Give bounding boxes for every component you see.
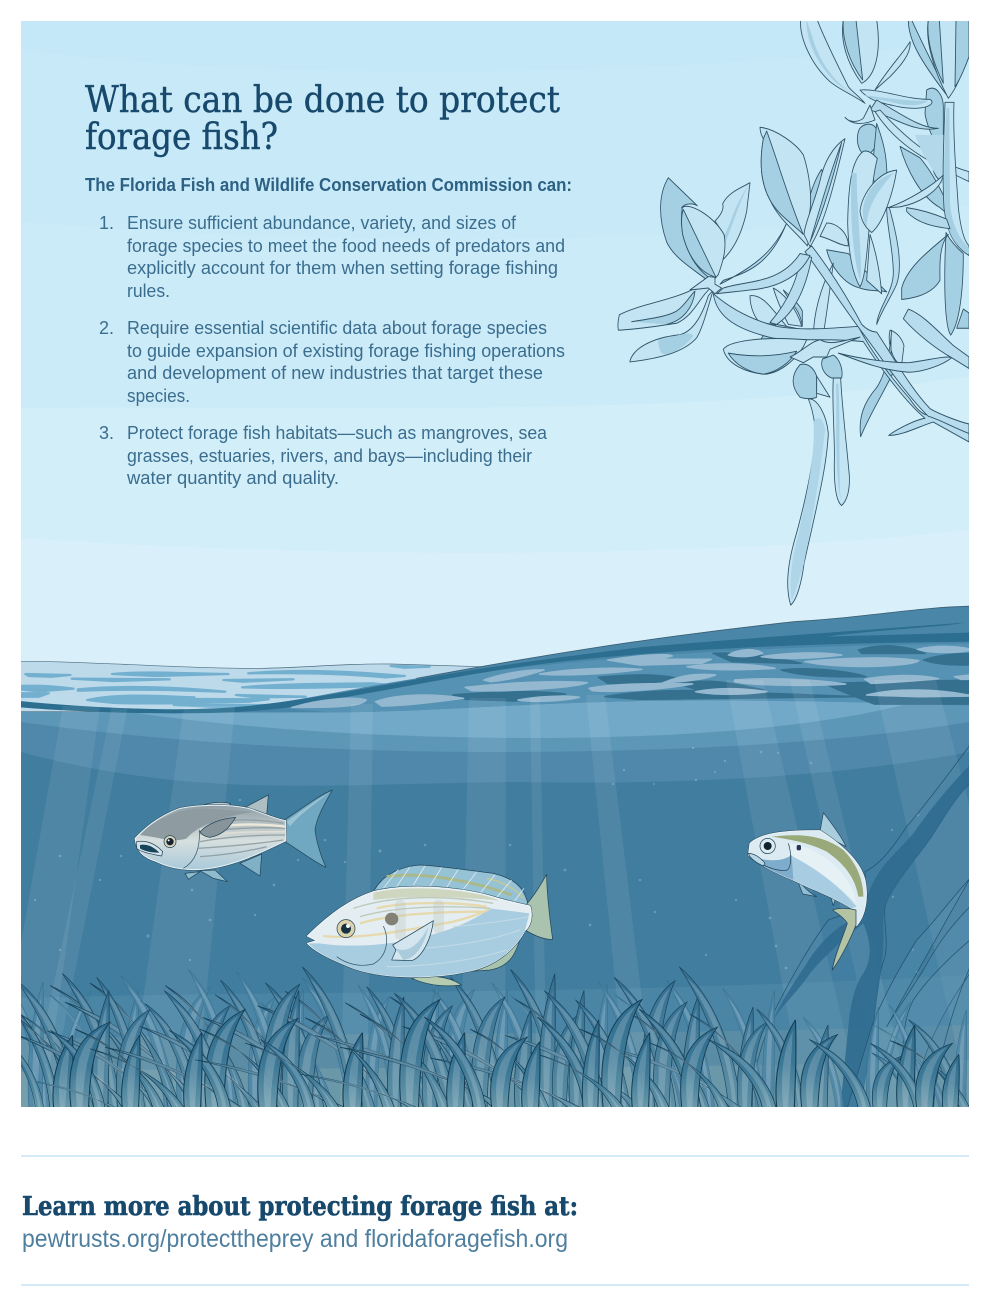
fins xyxy=(245,795,268,815)
list item 2: species. xyxy=(127,386,190,406)
tail xyxy=(525,874,553,939)
gill and pectoral fin xyxy=(183,830,199,868)
near wave body xyxy=(20,606,980,713)
main branches xyxy=(713,208,969,442)
sea grass: background blades xyxy=(2,969,967,1112)
near wave lighter band xyxy=(286,643,980,712)
sea grass: middle blades xyxy=(16,967,970,1112)
underwater gradient bands xyxy=(21,680,969,1107)
root body xyxy=(747,745,970,1110)
fish: pinfish xyxy=(307,865,553,986)
list item 3: grasses, estuaries, rivers, and bays—including their xyxy=(127,446,532,466)
sky background xyxy=(21,21,969,721)
footer call to action: Learn more about protecting forage fish at: xyxy=(22,1192,578,1222)
list item 1: explicitly account for them when setting forage fishing xyxy=(127,258,558,278)
right stem with pod xyxy=(888,102,969,335)
far wave xyxy=(20,662,481,712)
subheading: The Florida Fish and Wildlife Conservation Commission can: xyxy=(85,175,572,195)
list item 3: Protect forage fish habitats—such as mangroves, sea xyxy=(127,423,548,443)
fish: scaled sardine xyxy=(748,813,866,970)
pod leaf pair at centre xyxy=(760,127,897,287)
body xyxy=(307,887,531,977)
snout xyxy=(748,853,765,866)
eye xyxy=(164,836,176,848)
mouth xyxy=(137,841,163,856)
heading: What can be done to protect xyxy=(85,80,560,121)
stripes xyxy=(198,820,285,857)
sea grass: front blades xyxy=(0,1000,971,1112)
fish: silver mullet xyxy=(135,790,332,882)
light foam patches xyxy=(293,647,980,707)
gill xyxy=(763,843,791,870)
list item 1: forage species to meet the food needs of predators and xyxy=(127,236,565,256)
near wave dark band xyxy=(20,623,980,713)
lower fins xyxy=(797,878,817,897)
heading: forage fish? xyxy=(85,117,278,158)
mangrove branches and leaves xyxy=(618,102,969,605)
list item 2 xyxy=(99,318,565,406)
list item 1 xyxy=(99,213,565,301)
mangrove prop roots xyxy=(747,745,970,1110)
list item 2: Require essential scientific data about forage species xyxy=(127,318,547,338)
tail xyxy=(283,790,332,867)
spot xyxy=(385,913,398,925)
footer links: pewtrusts.org/protecttheprey and floridaforagefish.org xyxy=(22,1225,568,1253)
mangrove top leaves xyxy=(801,20,969,182)
back leaves at centre xyxy=(750,169,948,437)
spot xyxy=(797,845,801,850)
list item 1: Ensure sufficient abundance, variety, and sizes of xyxy=(127,213,517,233)
sun rays xyxy=(0,680,990,1107)
list item 3 xyxy=(99,423,548,488)
lower fins xyxy=(467,933,522,972)
list item 2: and development of new industries that target these xyxy=(127,363,543,383)
list item 2: to guide expansion of existing forage fishing operations xyxy=(127,341,565,361)
list item 1: rules. xyxy=(127,281,170,301)
list item 1: 1. xyxy=(99,213,114,233)
dorsal fin xyxy=(820,813,846,847)
vertical bands xyxy=(395,900,444,940)
body xyxy=(135,805,286,870)
hanging propagules xyxy=(723,337,860,605)
tail xyxy=(832,908,856,970)
pectoral fin xyxy=(392,921,433,961)
gill xyxy=(337,926,387,965)
stripes xyxy=(323,903,490,937)
list item 3: water quantity and quality. xyxy=(126,468,339,488)
water specks xyxy=(34,747,919,973)
list item 3: 3. xyxy=(99,423,114,443)
heading xyxy=(85,80,560,158)
right roots xyxy=(847,878,970,1110)
dark patches xyxy=(454,646,980,704)
list item 2: 2. xyxy=(99,318,114,338)
body xyxy=(748,831,866,926)
dorsal fin xyxy=(374,865,528,906)
left leaf cluster xyxy=(618,178,750,362)
eye xyxy=(760,838,775,854)
back right leaves xyxy=(856,122,944,212)
water surface waves xyxy=(20,606,980,713)
eye xyxy=(337,920,355,938)
far wave ripples xyxy=(20,666,429,707)
dark root band xyxy=(772,765,970,1110)
